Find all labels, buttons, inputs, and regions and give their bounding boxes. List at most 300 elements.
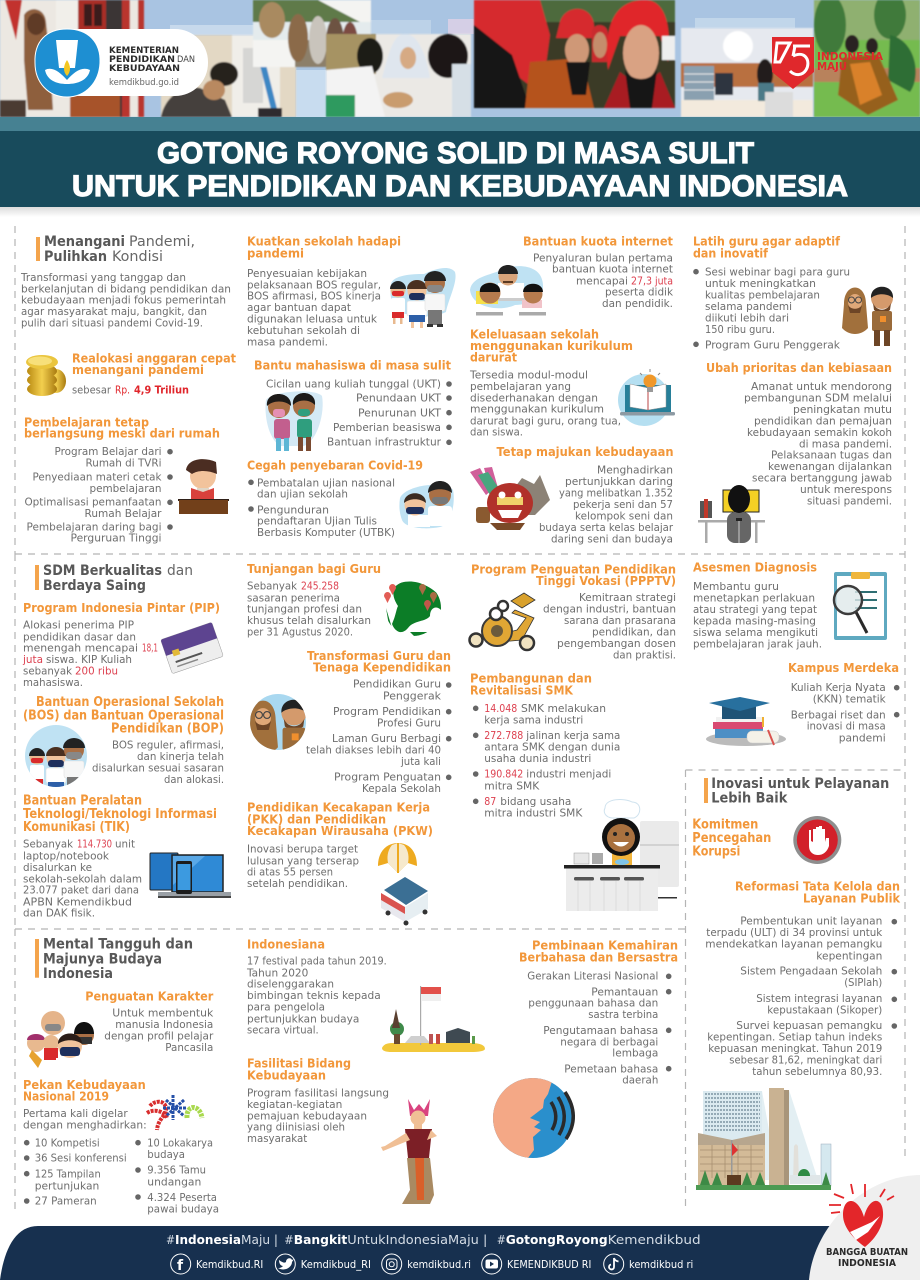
section heading — [35, 937, 193, 982]
panel: Bantuan kuota internet: bantuan kuota internet — [552, 263, 674, 276]
panel: PPPTV program: Program Penguatan Pendidikan — [471, 561, 676, 576]
panel: Pembangunan dan Revitalisasi SMK: 14.048 — [484, 702, 517, 715]
icon: person working at a desk — [698, 485, 765, 543]
title banner — [0, 117, 920, 217]
title: GOTONG ROYONG SOLID DI MASA SULIT — [157, 137, 754, 170]
panel: Transformasi Guru dan Tenaga Kependidikan: Program Penguatan — [334, 771, 441, 784]
block: governance reform: kepustakaan (Sikoper) — [767, 1003, 882, 1016]
icon: gold coins — [26, 355, 66, 396]
icon: green globe with location pins — [384, 581, 441, 640]
block: Program Indonesia Pintar: 200 ribu — [75, 665, 118, 678]
panel: Ubah prioritas dan kebiasaan: di masa pandemi. — [799, 437, 892, 450]
panel: Bantuan kuota internet — [470, 234, 674, 316]
block: Pekan Kebudayaan Nasional 2019: dengan menghadirkan: — [23, 1118, 147, 1131]
panel: Ubah prioritas dan kebiasaan — [698, 360, 892, 543]
title — [72, 137, 848, 203]
block: Pekan Kebudayaan Nasional 2019: 10 Lokakarya — [147, 1137, 213, 1150]
block: BOS and BOP: Pendidikan (BOP) — [111, 721, 224, 736]
block: learning from home: Rumah Belajar — [84, 507, 162, 520]
panel: Ubah prioritas dan kebiasaan: kewenangan dijalankan — [768, 460, 892, 473]
panel: Latih guru agar adaptif: Sesi webinar bagi para guru — [705, 266, 850, 279]
panel: Fasilitasi Bidang Kebudayaan: Kebudayaan — [247, 1067, 326, 1082]
panel: Tetap majukan kebudayaan: Menghadirkan — [597, 464, 673, 477]
panel: PPPTV program: dan praktisi. — [613, 648, 676, 661]
badge: Bangga Buatan Indonesia — [809, 1175, 920, 1280]
block: Pekan Kebudayaan Nasional 2019: pertunjukan — [35, 1179, 99, 1192]
panel: Tetap majukan kebudayaan — [470, 444, 674, 545]
panel: Asesmen Diagnosis: siswa selama mengikuti — [693, 626, 818, 639]
panel: Bantu mahasiswa di masa sulit: Penurunan UKT — [358, 406, 441, 419]
panel: Keleluasaan sekolah: darurat bagi guru, orang tua, — [470, 414, 621, 427]
block: Pekan Kebudayaan Nasional 2019: 36 Sesi konferensi — [35, 1152, 127, 1165]
icon: laptop, tablet and phone — [150, 853, 231, 898]
block: Program Indonesia Pintar: menengah mencapai — [23, 642, 138, 655]
panel: Kuatkan sekolah hadapi pandemi: Kuatkan sekolah hadapi — [247, 234, 401, 249]
panel: Fasilitasi Bidang Kebudayaan: Program fasilitasi langsung — [247, 1086, 389, 1099]
panel: Ubah prioritas dan kebiasaan: pendidikan dan pemajuan — [754, 414, 892, 427]
panel: PKK and PKW: Kecakapan Wirausaha (PKW) — [247, 823, 433, 838]
panel: Latih guru agar adaptif: 150 ribu guru. — [705, 323, 775, 336]
block: Pekan Kebudayaan Nasional 2019: undangan — [147, 1175, 201, 1188]
panel: Keleluasaan sekolah: Keleluasaan sekolah — [470, 327, 599, 342]
block: Pekan Kebudayaan Nasional 2019: Nasional 2019 — [23, 1089, 109, 1104]
section heading: Berdaya Saing — [43, 578, 146, 594]
panel: Transformasi Guru dan Tenaga Kependidikan: Tenaga Kependidikan — [313, 660, 451, 675]
panel: Fasilitasi Bidang Kebudayaan: yang diinisiasi oleh — [247, 1121, 345, 1134]
block: Program Indonesia Pintar: 18,1 — [142, 642, 158, 655]
panel: Asesmen Diagnosis: Membantu guru — [693, 580, 779, 593]
panel: Pembinaan Kemahiran Berbahasa dan Bersastra: sastra terbina — [588, 1008, 658, 1021]
panel: Bantuan kuota internet: peserta didik — [605, 286, 674, 299]
panel: Tunjangan bagi Guru — [247, 561, 441, 640]
panel: Cegah penyebaran Covid-19: dan ujian sekolah — [257, 488, 348, 501]
block: Program Indonesia Pintar: Alokasi penerima PIP — [23, 619, 134, 632]
block: TIK equipment: APBN Kemendikbud — [23, 895, 132, 908]
callout: budget reallocation: 4,9 Triliun — [134, 383, 189, 396]
hashtags: Indonesia — [175, 1232, 241, 1247]
panel: Tunjangan bagi Guru: sasaran penerima — [247, 591, 340, 604]
panel: Latih guru agar adaptif: Latih guru agar adaptif — [693, 234, 840, 249]
panel: Pembinaan Kemahiran Berbahasa dan Bersastra: Gerakan Literasi Nasional — [527, 970, 658, 983]
panel: PKK and PKW: (PKK) dan Pendidikan — [247, 811, 386, 826]
panel: Pembangunan dan Revitalisasi SMK: kerja sama industri — [484, 714, 583, 727]
hashtags: # — [284, 1232, 294, 1247]
panel: Pembangunan dan Revitalisasi SMK: Revitalisasi SMK — [470, 682, 574, 697]
block: governance reform: sebesar 81,62, meningkat dari — [729, 1053, 882, 1066]
block: TIK equipment — [23, 794, 231, 920]
intro text: agar masyarakat maju, bangkit, dan — [21, 305, 207, 318]
panel: Pembangunan dan Revitalisasi SMK: industri menjadi — [526, 768, 611, 781]
panel: Fasilitasi Bidang Kebudayaan: Fasilitasi Bidang — [247, 1056, 351, 1071]
panel: Tetap majukan kebudayaan: yang melibatkan 1.352 — [559, 487, 673, 500]
block: Penguatan Karakter: Penguatan Karakter — [85, 988, 214, 1003]
panel: Pembinaan Kemahiran Berbahasa dan Bersastra: Pembinaan Kemahiran — [532, 938, 678, 953]
panel: Transformasi Guru dan Tenaga Kependidikan: Laman Guru Berbagi — [332, 732, 441, 745]
panel: Keleluasaan sekolah: Tersedia modul-modul — [469, 368, 588, 381]
panel: Latih guru agar adaptif: kualitas pembelajaran — [705, 288, 820, 301]
panel: Tunjangan bagi Guru: khusus telah disalurkan — [247, 614, 371, 627]
panel: Asesmen Diagnosis — [693, 560, 887, 650]
section heading: Mental Tangguh dan — [43, 937, 193, 953]
callout: budget reallocation: sebesar — [72, 383, 111, 396]
icon: PKN logo — [147, 1095, 202, 1130]
panel: Indonesiana: para pengelola — [247, 1001, 325, 1014]
photo: seaside children — [253, 0, 371, 67]
panel: Cegah penyebaran Covid-19 — [247, 457, 454, 539]
icon: ministry buildings — [696, 1088, 831, 1190]
panel: Latih guru agar adaptif: selama pandemi — [705, 300, 792, 313]
icon: students with masks — [390, 268, 456, 328]
panel: Fasilitasi Bidang Kebudayaan: kegiatan-kegiatan — [247, 1098, 342, 1111]
panel: Pembangunan dan Revitalisasi SMK: 190.842 — [484, 768, 523, 781]
panel: Inovasi untuk Pelayanan Lebih Baik — [692, 776, 901, 1190]
block: Pekan Kebudayaan Nasional 2019: 9.356 Tamu — [147, 1164, 206, 1177]
block: TIK equipment: sekolah-sekolah dalam — [23, 872, 142, 885]
panel: Kuatkan sekolah hadapi pandemi — [247, 234, 456, 348]
logo: Kementerian Pendidikan dan Kebudayaan — [35, 29, 208, 97]
panel: PPPTV program: Kemitraan strategi — [579, 591, 676, 604]
panel: Bantu mahasiswa di masa sulit: Bantuan infrastruktur — [327, 436, 442, 449]
section heading: Indonesia — [43, 966, 113, 982]
block: Pekan Kebudayaan Nasional 2019: Pekan Kebudayaan — [23, 1077, 146, 1092]
intro text: kebudayaan menjadi fokus pemerintah — [21, 294, 226, 307]
icon: two teachers — [842, 287, 893, 346]
panel: Indonesiana: Indonesiana — [247, 937, 325, 952]
panel: PPPTV program: Tinggi Vokasi (PPPTV) — [536, 573, 676, 588]
panel: Kuatkan sekolah hadapi pandemi: agar bantuan dapat — [247, 301, 352, 314]
block: governance reform: Pembentukan unit layanan — [740, 915, 882, 928]
panel: Tetap majukan kebudayaan: budaya serta kelas belajar — [539, 521, 673, 534]
hashtags: GotongRoyong — [506, 1232, 608, 1247]
section heading: Lebih Baik — [711, 791, 788, 807]
panel: Cegah penyebaran Covid-19: Berbasis Komputer (UTBK) — [257, 526, 395, 539]
block: learning from home: Pembelajaran daring bagi — [26, 520, 162, 533]
panel: Kampus Merdeka: Kampus Merdeka — [788, 660, 899, 675]
icon: food cart — [381, 877, 428, 926]
panel: Tunjangan bagi Guru: tunjangan profesi dan — [247, 603, 362, 616]
block: Penguatan Karakter: Pancasila — [165, 1041, 213, 1054]
icon: teachers in a circle — [250, 694, 306, 750]
panel: Cegah penyebaran Covid-19: Cegah penyebaran Covid-19 — [247, 457, 423, 472]
panel: Kuatkan sekolah hadapi pandemi: kebutuhan sekolah di — [247, 324, 360, 337]
panel: Cegah penyebaran Covid-19: Pengunduran — [257, 503, 329, 516]
panel: Kampus Merdeka: Berbagai riset dan — [791, 708, 886, 721]
block: Penguatan Karakter: manusia Indonesia — [115, 1018, 213, 1031]
panel: Bantuan kuota internet: mencapai — [576, 274, 628, 287]
logo: 75 Indonesia Maju: MAJU — [817, 61, 847, 73]
block: learning from home: Program Belajar dari — [54, 445, 162, 458]
block: governance reform: tahun sebelumnya 80,93. — [752, 1065, 882, 1078]
photo: school hallway — [0, 0, 144, 117]
panel: Transformasi Guru dan Tenaga Kependidikan: Pendidikan Guru — [353, 678, 441, 691]
panel: Indonesiana: bimbingan teknis kepada — [247, 989, 381, 1002]
block: Program Indonesia Pintar — [22, 600, 223, 689]
logo: Kementerian Pendidikan dan Kebudayaan: KEMENTERIAN — [109, 46, 179, 56]
block: governance reform: kepentingan. Setiap tahun indeks — [707, 1030, 883, 1043]
block: learning from home: Rumah di TVRi — [86, 456, 162, 469]
panel: Bantuan kuota internet: 27,3 juta — [631, 274, 673, 287]
block: BOS and BOP: BOS reguler, afirmasi, — [112, 738, 224, 751]
block: BOS and BOP: Bantuan Operasional Sekolah — [36, 695, 224, 710]
panel: Ubah prioritas dan kebiasaan: peningkatan mutu — [793, 403, 892, 416]
panel: Bantu mahasiswa di masa sulit: Penundaan UKT — [356, 392, 441, 405]
logo: 75 Indonesia Maju: INDONESIA — [817, 51, 884, 63]
photo: lab students — [326, 34, 471, 117]
panel: Indonesiana: 17 festival pada tahun 2019. — [247, 955, 387, 968]
panel: Kuatkan sekolah hadapi pandemi: BOS afirmasi, BOS kinerja — [247, 290, 381, 303]
panel: Cegah penyebaran Covid-19: pendaftaran Ujian Tulis — [257, 515, 377, 528]
panel: Pembinaan Kemahiran Berbahasa dan Bersastra: Pemantauan — [591, 985, 658, 998]
logo: Kementerian Pendidikan dan Kebudayaan: PENDIDIKAN — [109, 55, 175, 65]
panel: Kuatkan sekolah hadapi pandemi: Penyesuaian kebijakan — [247, 267, 367, 280]
panel: Transformasi Guru dan Tenaga Kependidikan: telah diakses lebih dari 40 — [306, 743, 441, 756]
panel: Pembangunan dan Revitalisasi SMK: 87 — [484, 795, 496, 808]
callout: budget reallocation: Realokasi anggaran cepat — [72, 351, 236, 366]
panel: Ubah prioritas dan kebiasaan: situasi pandemi. — [807, 495, 892, 508]
block: Program Indonesia Pintar: juta — [22, 653, 43, 666]
panel: Pembinaan Kemahiran Berbahasa dan Bersastra: lembaga — [612, 1047, 658, 1060]
block: governance reform: Reformasi Tata Kelola dan — [735, 879, 900, 894]
panel: Tetap majukan kebudayaan: daring seni dan budaya — [551, 532, 673, 545]
panel: Kampus Merdeka: pandemi — [839, 731, 886, 744]
social media handles: Kemdikbud.RI — [196, 1258, 263, 1271]
panel: PPPTV program: pendidikan, dan — [592, 625, 676, 638]
panel: Keleluasaan sekolah: menggunakan kurikulum — [470, 338, 633, 353]
panel: Tetap majukan kebudayaan: Tetap majukan kebudayaan — [496, 444, 674, 459]
block: governance reform: kepuasan meningkat. Tahun 2019 — [708, 1042, 882, 1055]
panel: Keleluasaan sekolah: pembelajaran yang — [470, 380, 571, 393]
logo: 75 Indonesia Maju — [772, 37, 884, 89]
panel: Ubah prioritas dan kebiasaan: Amanat untuk mendorong — [751, 380, 892, 393]
panel: Asesmen Diagnosis: atau strategi yang tepat — [693, 603, 818, 616]
photo: library — [681, 28, 813, 117]
block: Pekan Kebudayaan Nasional 2019 — [23, 1077, 219, 1215]
panel: Tetap majukan kebudayaan: pekerja seni dan 57 — [573, 498, 673, 511]
social media handles: f — [177, 1258, 184, 1274]
panel: Latih guru agar adaptif — [693, 234, 893, 351]
icon: speaking profile with sound waves — [493, 1078, 573, 1158]
panel: Transformasi Guru dan Tenaga Kependidikan: Program Pendidikan — [333, 705, 441, 718]
panel: Pembinaan Kemahiran Berbahasa dan Bersastra: penggunaan bahasa dan — [528, 997, 658, 1010]
panel: Kampus Merdeka: Kuliah Kerja Nyata — [791, 681, 886, 694]
icon: graduation cap on books — [706, 697, 786, 746]
panel: Tetap majukan kebudayaan: pertunjukkan daring — [565, 475, 673, 488]
panel: PPPTV program: sarana dan prasarana — [564, 614, 676, 627]
block: TIK equipment: 23.077 paket dari dana — [23, 884, 139, 897]
callout: budget reallocation — [72, 351, 236, 396]
badge: Bangga Buatan Indonesia: INDONESIA — [838, 1258, 897, 1269]
logo: Kementerian Pendidikan dan Kebudayaan: kemdikbud.go.id — [109, 78, 179, 88]
icon: parasol — [378, 843, 417, 873]
block: anti-corruption commitment: Komitmen — [692, 817, 758, 832]
panel: Latih guru agar adaptif: dan inovatif — [693, 245, 768, 260]
icon: clipboard with magnifier — [834, 572, 887, 640]
block: Program Indonesia Pintar: siswa. KIP Kuliah — [46, 653, 132, 666]
block: TIK equipment: dan DAK fisik. — [23, 907, 95, 920]
title: UNTUK PENDIDIKAN DAN KEBUDAYAAN INDONESIA — [72, 170, 848, 203]
section heading: SDM Berkualitas — [43, 563, 162, 579]
panel: PKK and PKW: di atas 55 persen — [247, 866, 333, 879]
panel: Menangani Pandemi, Pulihkan Kondisi — [20, 234, 236, 545]
block: Program Indonesia Pintar: sebanyak — [23, 665, 73, 678]
panel: Latih guru agar adaptif: Program Guru Penggerak — [705, 338, 841, 351]
panel: Keleluasaan sekolah: dan siswa. — [470, 426, 523, 439]
section heading: dan — [167, 563, 193, 579]
logo: Kementerian Pendidikan dan Kebudayaan: DAN — [177, 55, 195, 65]
panel: Fasilitasi Bidang Kebudayaan — [247, 1056, 437, 1204]
icon: two university students — [266, 391, 323, 451]
panel: Kuatkan sekolah hadapi pandemi: pelaksanaan BOS regular, — [247, 278, 381, 291]
panel: Pembinaan Kemahiran Berbahasa dan Bersastra: Berbahasa dan Bersastra — [519, 949, 678, 964]
panel: Latih guru agar adaptif: diikuti lebih dari — [705, 311, 789, 324]
panel: Asesmen Diagnosis: menetapkan perlakuan — [693, 592, 815, 605]
panel: PKK and PKW — [247, 800, 433, 926]
panel: Ubah prioritas dan kebiasaan: secara bertanggung jawab — [752, 472, 892, 485]
panel: PPPTV program: pengembangan dosen — [557, 637, 676, 650]
hashtags: Maju | — [241, 1232, 278, 1247]
block: learning from home: Penyediaan materi cetak — [32, 470, 162, 483]
intro text: berkelanjutan di bidang pendidikan dan — [21, 282, 231, 295]
panel: Kampus Merdeka — [706, 660, 900, 746]
block: Pekan Kebudayaan Nasional 2019: pawai budaya — [147, 1202, 219, 1215]
icon: students in a circle — [25, 725, 87, 787]
panel: PKK and PKW: setelah pendidikan. — [247, 877, 348, 890]
panel: Fasilitasi Bidang Kebudayaan: pemajuan kebudayaan — [247, 1109, 367, 1122]
panel: Ubah prioritas dan kebiasaan: Pelaksanaan tugas dan — [771, 449, 892, 462]
panel: Pembinaan Kemahiran Berbahasa dan Bersastra: daerah — [622, 1074, 658, 1087]
panel: Tunjangan bagi Guru: 245.258 — [301, 580, 339, 593]
panel: Pembinaan Kemahiran Berbahasa dan Bersastra: Pemetaan bahasa — [564, 1062, 658, 1075]
panel: Tunjangan bagi Guru: Sebanyak — [247, 580, 298, 593]
panel: Keleluasaan sekolah: disederhanakan dengan — [470, 391, 598, 404]
panel: Pembinaan Kemahiran Berbahasa dan Bersastra: negara di berbagai — [560, 1035, 658, 1048]
hashtags: UntukIndonesiaMaju | — [347, 1232, 487, 1247]
panel: Bantu mahasiswa di masa sulit: Cicilan uang kuliah tunggal (UKT) — [266, 377, 441, 390]
panel: Pembangunan dan Revitalisasi SMK — [470, 671, 679, 911]
block: TIK equipment: Komunikasi (TIK) — [23, 820, 130, 835]
panel: Tunjangan bagi Guru: Tunjangan bagi Guru — [247, 561, 381, 576]
panel: Bantu mahasiswa di masa sulit: Bantu mahasiswa di masa sulit — [254, 358, 451, 373]
icon: traditional dancer — [381, 1099, 437, 1204]
block: BOS and BOP: (BOS) dan Bantuan Operasional — [23, 708, 224, 723]
panel: Pembangunan dan Revitalisasi SMK: usaha dunia industri — [484, 752, 591, 765]
block: BOS and BOP: dan kinerja telah — [137, 750, 224, 763]
panel: PPPTV program — [470, 561, 676, 661]
block: Program Indonesia Pintar: pendidikan dasar dan — [23, 630, 136, 643]
badge: Bangga Buatan Indonesia: BANGGA BUATAN — [826, 1247, 908, 1258]
panel: Mental Tangguh dan Majunya Budaya Indonesia — [23, 937, 219, 1215]
logo: Kementerian Pendidikan dan Kebudayaan: KEBUDAYAAN — [109, 64, 180, 74]
icon: boy studying at desk — [178, 459, 229, 514]
block: Pekan Kebudayaan Nasional 2019: 4.324 Peserta — [147, 1191, 217, 1204]
panel: Pembangunan dan Revitalisasi SMK: jalinan kerja sama — [525, 729, 620, 742]
icon: Indonesian flag and landmarks — [382, 986, 485, 1052]
intro text: Transformasi yang tanggap dan — [20, 271, 186, 284]
panel: Pembangunan dan Revitalisasi SMK: bidang usaha — [500, 795, 571, 808]
social media handles: KEMENDIKBUD RI — [507, 1258, 591, 1271]
panel: Transformasi Guru dan Tenaga Kependidikan: juta kali — [400, 755, 441, 768]
block: BOS and BOP — [23, 695, 224, 795]
hashtags: Bangkit — [294, 1232, 347, 1247]
panel: Keleluasaan sekolah: darurat — [470, 350, 517, 365]
panel: Indonesiana: diselenggarakan — [247, 978, 334, 991]
panel: Asesmen Diagnosis: pembelajaran jarak jauh. — [693, 637, 822, 650]
icon: chef in a kitchen — [564, 800, 679, 911]
panel: Ubah prioritas dan kebiasaan: kebudayaan semakin kokoh — [747, 426, 892, 439]
panel: Bantu mahasiswa di masa sulit — [254, 358, 452, 451]
panel: Bantu mahasiswa di masa sulit: Pemberian beasiswa — [333, 421, 441, 434]
panel: PKK and PKW: Pendidikan Kecakapan Kerja — [247, 800, 430, 815]
block: governance reform: mendekatkan layanan pemangku — [705, 938, 882, 951]
panel: Kampus Merdeka: (KKN) tematik — [813, 693, 886, 706]
block: governance reform: kepentingan — [816, 949, 882, 962]
block: governance reform: terpadu (ULT) di 34 provinsi untuk — [706, 926, 883, 939]
block: Pekan Kebudayaan Nasional 2019: Pertama kali digelar — [23, 1107, 128, 1120]
block: governance reform: Sistem integrasi layanan — [756, 992, 882, 1005]
section heading — [36, 234, 195, 265]
icon: online learning children — [470, 265, 546, 316]
panel: Pembangunan dan Revitalisasi SMK: mitra SMK — [484, 779, 540, 792]
panel: Pembangunan dan Revitalisasi SMK: antara SMK dengan dunia — [484, 741, 620, 754]
panel: Ubah prioritas dan kebiasaan: Ubah prioritas dan kebiasaan — [706, 360, 892, 375]
panel: Asesmen Diagnosis: Asesmen Diagnosis — [693, 560, 817, 575]
panel: Keleluasaan sekolah: menggunakan kurikulum — [470, 403, 604, 416]
block: Pekan Kebudayaan Nasional 2019: 125 Tampilan — [35, 1168, 101, 1181]
panel: Tunjangan bagi Guru: per 31 Agustus 2020. — [247, 626, 353, 639]
panel: Kampus Merdeka: inovasi di masa — [807, 720, 886, 733]
panel: Bantuan kuota internet: Bantuan kuota internet — [523, 234, 673, 249]
panel: SDM Berkualitas dan Berdaya Saing — [22, 563, 231, 920]
header photo collage — [0, 0, 920, 117]
block: learning from home: Perguruan Tinggi — [70, 532, 162, 545]
social media handles — [171, 1254, 693, 1274]
intro text — [20, 271, 231, 330]
block: TIK equipment: Bantuan Peralatan — [23, 794, 142, 809]
panel: Pembangunan dan Revitalisasi SMK: SMK melakukan — [521, 702, 606, 715]
icon: masked student and teacher — [399, 481, 454, 528]
block: Penguatan Karakter: dengan profil pelajar — [104, 1029, 214, 1042]
panel: Latih guru agar adaptif: untuk meningkatkan — [705, 277, 816, 290]
photo: microscope — [161, 35, 296, 117]
block: learning from home — [24, 414, 229, 545]
hashtags: Kemendikbud — [608, 1232, 701, 1247]
panel: Cegah penyebaran Covid-19: Pembatalan ujian nasional — [257, 476, 395, 489]
photo: dancer in a park — [814, 0, 920, 117]
icon: stop hand button — [793, 816, 841, 864]
block: BOS and BOP: disalurkan sesuai sasaran — [92, 762, 224, 775]
block: governance reform: Survei kepuasan pemangku — [736, 1019, 882, 1032]
hashtags: # — [497, 1232, 506, 1247]
panel: Fasilitasi Bidang Kebudayaan: masyarakat — [247, 1132, 308, 1145]
block: anti-corruption commitment — [692, 816, 841, 864]
panel: Asesmen Diagnosis: kepada masing-masing — [693, 614, 816, 627]
panel: Keleluasaan sekolah — [469, 327, 675, 439]
callout: budget reallocation: menangani pandemi — [72, 362, 204, 377]
block: Penguatan Karakter — [27, 988, 214, 1069]
block: Pekan Kebudayaan Nasional 2019: 27 Pameran — [35, 1195, 97, 1208]
panel: Pembangunan dan Revitalisasi SMK: 272.788 — [484, 729, 523, 742]
section heading — [704, 776, 889, 807]
section heading: Inovasi untuk Pelayanan — [711, 776, 889, 792]
block: learning from home: Optimalisasi pemanfaatan — [24, 495, 162, 508]
block: learning from home: berlangsung meski dari rumah — [24, 426, 220, 441]
icon: KIP card — [161, 622, 223, 674]
icon: barong mask and mountains — [470, 467, 550, 530]
intro text: pulih dari situasi pandemi Covid-19. — [21, 317, 203, 330]
panel: Bantuan kuota internet: Penyaluran bulan pertama — [533, 251, 673, 264]
panel: Ubah prioritas dan kebiasaan: untuk merespons — [800, 483, 892, 496]
panel: Indonesiana — [246, 937, 485, 1052]
